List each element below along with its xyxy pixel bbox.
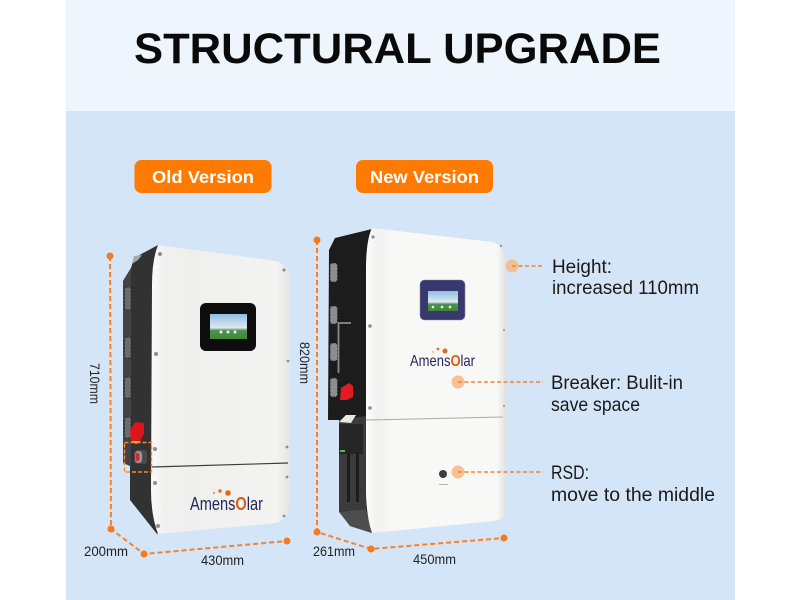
label: 450mm: 450mm xyxy=(413,551,456,567)
new unit red breaker xyxy=(340,383,353,400)
callout: RSD: move to the middle xyxy=(551,485,715,506)
callout: breaker: save space xyxy=(551,395,640,416)
old unit front panel xyxy=(151,245,290,534)
main panel xyxy=(66,111,735,600)
old unit vent fans xyxy=(124,287,131,438)
badge: new version: New Version xyxy=(370,167,479,187)
badge: old version: Old Version xyxy=(152,167,254,187)
callout: breaker xyxy=(452,373,683,416)
old unit dark side body xyxy=(123,245,170,534)
header panel xyxy=(66,0,735,111)
old version inverter xyxy=(123,245,290,534)
label: 820mm: 820mm xyxy=(297,342,313,384)
callout: RSD: RSD: xyxy=(551,463,589,484)
new version dimension lines xyxy=(314,236,508,552)
new unit connector block xyxy=(339,415,363,502)
callout: height xyxy=(506,257,699,299)
callout: RSD xyxy=(452,463,715,506)
old version dimension lines xyxy=(106,252,290,558)
old unit screen xyxy=(200,303,256,351)
old unit RSD knob, dashed highlight xyxy=(124,442,152,472)
title: STRUCTURAL UPGRADE xyxy=(134,25,661,73)
new unit RSD button xyxy=(439,470,448,485)
badge: old version xyxy=(134,160,272,193)
old unit screws xyxy=(153,252,289,528)
label: 430mm: 430mm xyxy=(201,552,244,568)
new unit dark side body xyxy=(328,229,378,533)
new unit logo: AmensOlar xyxy=(410,353,476,370)
new unit handle xyxy=(338,323,351,373)
new unit vent fans xyxy=(330,263,338,397)
new unit screws xyxy=(368,235,505,410)
old unit logo: AmensOlar xyxy=(190,494,263,514)
label: 261mm: 261mm xyxy=(313,543,355,559)
callout: height: Height: xyxy=(552,257,612,278)
callout: height: increased 110mm xyxy=(552,278,699,299)
badge: new version xyxy=(356,160,493,193)
new version inverter xyxy=(328,228,507,533)
callout: breaker: Breaker: Bulit-in xyxy=(551,373,683,394)
new unit screen xyxy=(420,280,465,320)
label: 200mm: 200mm xyxy=(84,543,128,559)
new unit front panel xyxy=(366,228,507,533)
old unit red breaker switch xyxy=(130,422,144,444)
label: 710mm: 710mm xyxy=(87,363,103,404)
